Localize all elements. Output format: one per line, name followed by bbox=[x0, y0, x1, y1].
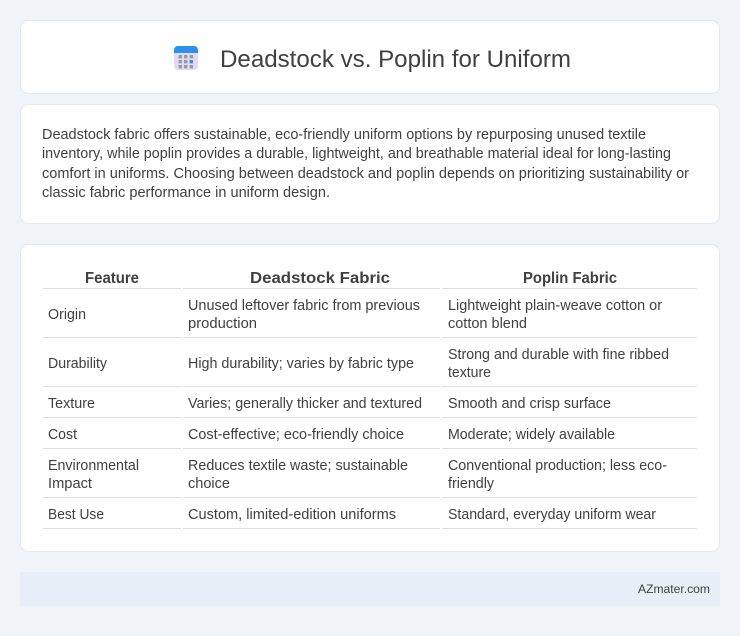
table row: best use: Best Use bbox=[48, 507, 104, 523]
table row: best use: Standard, everyday uniform wear bbox=[448, 507, 656, 523]
text block: description: inventory, while poplin provides a durable, lightweight, and breathable material ideal for long-lasting bbox=[42, 146, 671, 162]
table row: cost bbox=[48, 427, 615, 443]
table row: best use bbox=[48, 507, 656, 523]
table row: origin: Origin bbox=[48, 307, 86, 323]
table row: origin: production bbox=[188, 316, 257, 332]
panel: header card bbox=[20, 20, 720, 94]
table row: texture: Smooth and crisp surface bbox=[448, 396, 611, 412]
table row: cost: Moderate; widely available bbox=[448, 427, 615, 443]
title: Deadstock vs. Poplin for Uniform bbox=[220, 46, 571, 73]
panel: description card bbox=[20, 104, 720, 224]
panel: comparison table card bbox=[20, 244, 720, 552]
table row: environmental impact: Impact bbox=[48, 476, 92, 492]
table row: cost: Cost bbox=[48, 427, 77, 443]
footer credit: AZmater.com bbox=[638, 582, 710, 596]
icon: calendar bbox=[174, 46, 198, 70]
footer bar bbox=[20, 572, 720, 606]
table row: origin: cotton blend bbox=[448, 316, 527, 332]
text block: description bbox=[42, 127, 689, 201]
table row: texture: Texture bbox=[48, 396, 95, 412]
table row: texture bbox=[48, 396, 611, 412]
table row: environmental impact: choice bbox=[188, 476, 230, 492]
table row: environmental impact: Reduces textile waste; sustainable bbox=[188, 458, 408, 474]
table header row bbox=[85, 270, 617, 287]
table row: durability: Strong and durable with fine ribbed bbox=[448, 347, 669, 363]
table row: environmental impact: Environmental bbox=[48, 458, 139, 474]
table row: environmental impact: friendly bbox=[448, 476, 495, 492]
table row: origin bbox=[48, 298, 662, 332]
table row: environmental impact bbox=[48, 458, 667, 492]
table header row: Deadstock Fabric bbox=[250, 270, 390, 287]
table row: environmental impact: Conventional production; less eco- bbox=[448, 458, 667, 474]
table header row: Poplin Fabric bbox=[523, 270, 617, 287]
text block: description: comfort in uniforms. Choosing between deadstock and poplin depends on prioritizing sustainability or bbox=[42, 166, 689, 182]
text block: description: Deadstock fabric offers sustainable, eco-friendly uniform options by repurposing unused textile bbox=[42, 127, 646, 143]
text block: description: classic fabric performance in uniform design. bbox=[42, 185, 330, 201]
table row: durability: Durability bbox=[48, 356, 108, 372]
table row: texture: Varies; generally thicker and textured bbox=[188, 396, 422, 412]
table header row: Feature bbox=[85, 270, 139, 287]
table row: origin: Lightweight plain-weave cotton or bbox=[448, 298, 662, 314]
table row: origin: Unused leftover fabric from previous bbox=[188, 298, 420, 314]
table row: durability: High durability; varies by fabric type bbox=[188, 356, 414, 372]
table row: durability bbox=[48, 347, 669, 381]
table row: cost: Cost-effective; eco-friendly choice bbox=[188, 427, 404, 443]
table row: durability: texture bbox=[448, 365, 491, 381]
table row: best use: Custom, limited-edition uniforms bbox=[188, 507, 396, 523]
